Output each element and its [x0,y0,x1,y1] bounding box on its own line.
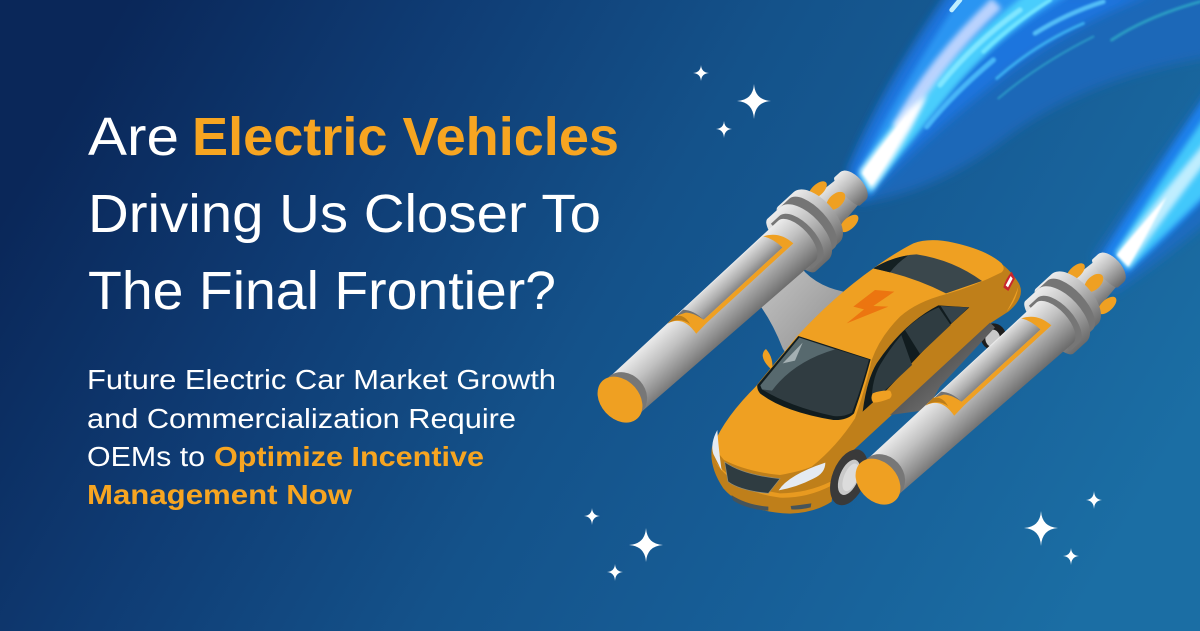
rear window [873,254,982,293]
left engine wing strut [756,262,843,360]
subtitle: Optimize Incentive [214,441,484,472]
stars top group [693,65,771,138]
underbody shadow [890,323,995,415]
stars bottom left group [584,508,663,581]
subtitle: OEMs to [87,441,205,472]
title: Electric Vehicles [192,107,619,167]
left engine flame [848,0,1200,203]
lower right vent [791,503,811,509]
left engine [582,153,886,440]
right side mirror [871,391,892,403]
front bumper highlight [714,460,831,498]
rear wheel [981,323,1006,350]
front grille [725,462,780,493]
right engine flame [1093,77,1200,293]
front wheel [823,444,875,511]
car body side [711,260,1021,514]
windshield [757,336,871,420]
side windows [863,305,969,412]
left side mirror [763,349,772,370]
left headlight [712,430,722,471]
title: Are [88,107,179,167]
stars bottom right group [1024,491,1102,565]
engine end ring [594,363,656,426]
car [711,240,1021,514]
engine orange cap [588,368,652,432]
rear body crease [1007,287,1018,312]
tail light [1003,272,1015,291]
subtitle: Future Electric Car Market Growth [87,364,556,395]
title: The Final Frontier? [88,261,556,321]
car hood and roof [713,240,1004,475]
subtitle [87,364,556,510]
right headlight [779,463,825,490]
subtitle: Management Now [87,479,352,510]
subtitle: and Commercialization Require [87,403,516,434]
right engine [840,235,1144,522]
lightning bolt [847,290,894,323]
title: Driving Us Closer To [88,184,601,244]
title [88,107,619,321]
barrel inset panel [667,224,794,343]
lower left vent [731,495,768,511]
